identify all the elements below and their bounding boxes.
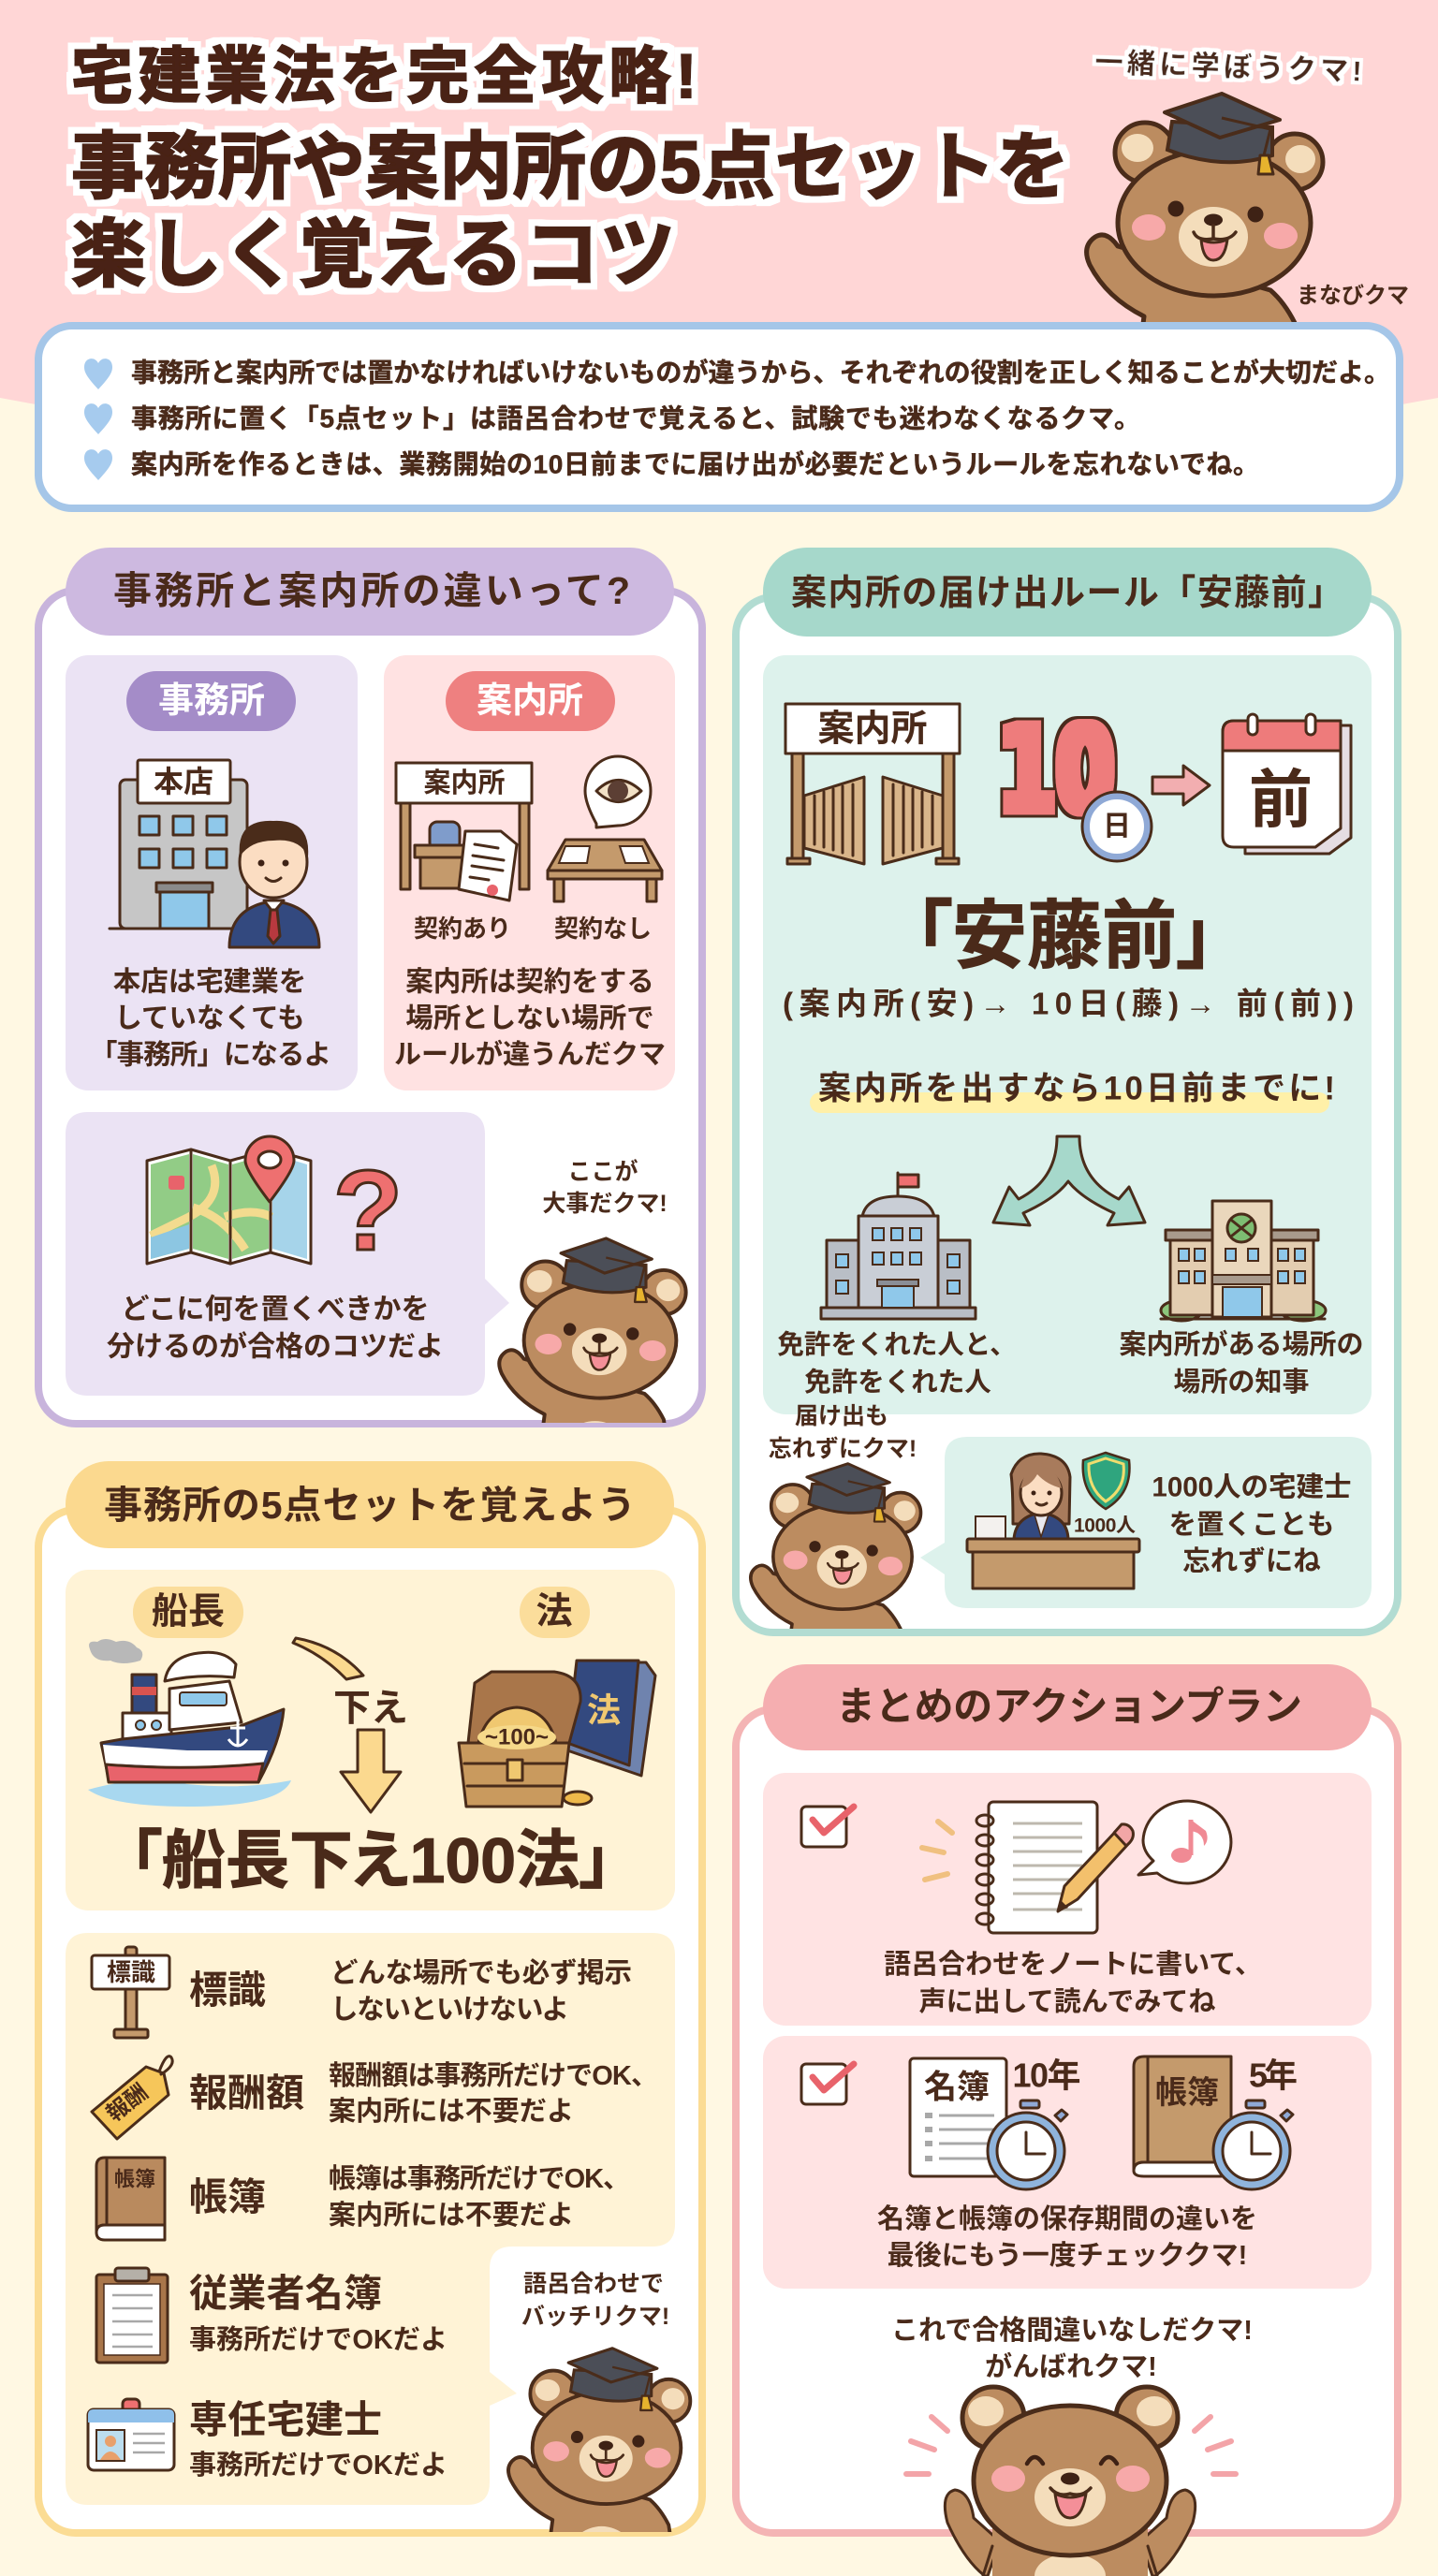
icon: building <box>110 760 247 929</box>
item: 報酬額: 報酬額は事務所だけでOK、 <box>329 2060 658 2091</box>
card: note action: 語呂合わせをノートに書いて、 <box>884 1949 1262 1980</box>
icon: eye bubble <box>585 756 651 827</box>
callout: 合格のコツ <box>66 1112 509 1396</box>
card: 事務所: 事務所 <box>158 681 265 721</box>
item: 標識: しないといけないよ <box>330 1994 569 2026</box>
船長 pill <box>133 1587 243 1638</box>
callout: 合格のコツ: 分けるのが合格のコツだよ <box>107 1331 444 1363</box>
icon: treasure chest <box>459 1672 592 1807</box>
text <box>90 966 331 1071</box>
mascot bear <box>497 1237 688 1423</box>
icon: 案内所 with contract: 案内所 <box>423 768 506 798</box>
card: review action: 名簿と帳簿の保存期間の違いを <box>877 2203 1257 2234</box>
label: 10年: 10年 <box>1013 2056 1080 2095</box>
heading pill <box>763 548 1372 637</box>
card: mnemonic: 法 <box>536 1591 573 1632</box>
title: 宅建業法を完全攻略! <box>71 41 697 110</box>
item: 帳簿: 案内所には不要だよ <box>329 2200 574 2231</box>
icon: receptionist with shield: 1000人 <box>1074 1515 1136 1537</box>
icon: checkbox <box>801 2064 854 2104</box>
panel: まとめのアクションプラン <box>736 1664 1398 2576</box>
arrow: split <box>993 1136 1145 1225</box>
callout: 1000人の宅建士 <box>920 1437 1372 1608</box>
icon: question mark: ? <box>333 1147 403 1274</box>
bear comment <box>542 1158 668 1217</box>
heading: 事務所と案内所の違いって? <box>113 569 630 612</box>
mnemonic: 「安藤前」 <box>915 895 1214 977</box>
item: 標識: どんな場所でも必ず掲示 <box>330 1958 632 1988</box>
icon: ship <box>88 1639 291 1807</box>
mascot bear cheering <box>945 2387 1196 2576</box>
panel: 事務所の5点セット <box>38 1461 702 2576</box>
heading pill <box>763 1664 1372 1750</box>
text: 「事務所」になるよ <box>90 1039 331 1071</box>
text: 本店は宅建業を <box>113 966 306 998</box>
card: note action <box>763 1773 1372 2026</box>
法 pill <box>520 1587 590 1638</box>
title: 事務所や案内所の5点セットを <box>71 125 1069 208</box>
icon: map <box>147 1136 311 1264</box>
card: 事務所 <box>66 655 358 1090</box>
callout: 合格のコツ: どこに何を置くべきかを <box>121 1294 430 1325</box>
heading pill <box>66 1461 674 1548</box>
icon: book 法 <box>567 1661 655 1776</box>
arrow: down <box>341 1730 401 1812</box>
panel: summary <box>38 326 1400 508</box>
bear comment: 大事だクマ! <box>542 1191 668 1217</box>
text: していなくても <box>114 1003 305 1033</box>
callout: 1000人の宅建士: 1000人の宅建士 <box>1152 1471 1352 1503</box>
card: note action: 声に出して読んでみてね <box>919 1986 1215 2017</box>
sparks around bear <box>906 2417 1236 2474</box>
icon: gate <box>785 704 960 864</box>
card: 案内所 <box>384 655 675 1090</box>
closing message: がんばれクマ! <box>985 2350 1157 2382</box>
icon: stopwatch <box>988 2100 1067 2189</box>
heading: 案内所の届け出ルール「安藤前」 <box>791 574 1343 613</box>
item: 専任宅建士: 事務所だけでOKだよ <box>189 2450 448 2481</box>
icon: 帳簿 book: 帳簿 <box>1155 2075 1219 2111</box>
item: 標識: 標識 <box>107 1958 155 1986</box>
closing message <box>891 2315 1253 2382</box>
pink header background <box>0 0 1438 466</box>
bear comment: バッチリクマ! <box>521 2304 669 2330</box>
icon: calendar: 前 <box>1249 765 1313 836</box>
mascot name: まなびクマ <box>1297 283 1409 309</box>
item: 標識: 標識 <box>189 1969 266 2012</box>
mascot bear <box>749 1462 923 1629</box>
arrow <box>1152 766 1210 805</box>
icon: prefecture office <box>1161 1201 1326 1321</box>
card: 案内所: 契約なし <box>554 915 652 943</box>
card: 案内所: 契約あり <box>414 915 511 943</box>
text: 知事: 場所の知事 <box>1173 1367 1310 1398</box>
card: review action: 最後にもう一度チェッククマ! <box>888 2240 1247 2271</box>
text: 免許: 免許をくれた人 <box>804 1368 991 1398</box>
card: review action <box>763 2036 1372 2289</box>
bear comment: 忘れずにクマ! <box>769 1436 917 1462</box>
bear comment <box>769 1403 917 1462</box>
text: 免許: 免許をくれた人と、 <box>777 1330 1017 1360</box>
bear speech: 一緒に学ぼうクマ: 一緒に学ぼうクマ! <box>1094 48 1362 87</box>
item: 帳簿: 帳簿 <box>114 2168 155 2190</box>
title <box>71 41 1069 296</box>
item: 帳簿: 帳簿は事務所だけでOK、 <box>329 2163 630 2194</box>
item: 報酬額: 報酬額 <box>189 2071 304 2115</box>
icon: 10日: 10 <box>998 702 1114 839</box>
icon: receptionist with shield <box>967 1453 1139 1588</box>
summary text: 事務所と案内所では置かなければいけないものが違うから、それぞれの役割を正しく知ることが大切だよ。 <box>131 358 1390 388</box>
arrow: curve <box>293 1638 363 1679</box>
icon: sparks <box>922 1822 952 1880</box>
highlight: 案内所を出すなら10日前までに! <box>818 1071 1335 1106</box>
item: 帳簿 <box>96 2158 630 2240</box>
heading: まとめのアクションプラン <box>836 1685 1302 1728</box>
icon: notebook and pencil <box>976 1802 1133 1933</box>
mnemonic expansion: (案内所(安)→ 10日(藤)→ 前(前)) <box>783 987 1354 1020</box>
icon: 名簿 paper: 名簿 <box>924 2069 990 2106</box>
mnemonic: 「船長下え100法」 <box>130 1825 611 1896</box>
icon: music bubble <box>1138 1801 1231 1883</box>
mascot: まなびクマ <box>1084 92 1326 322</box>
card: 案内所: 案内所 <box>477 681 583 721</box>
heading: 事務所の5点セットを覚えよう <box>104 1484 636 1527</box>
card: 案内所: 案内所は契約をする <box>405 966 654 998</box>
icon: calendar <box>1223 714 1351 854</box>
card: 案内所: 場所としない場所で <box>405 1003 654 1033</box>
title: 楽しく覚えるコツ <box>71 213 675 296</box>
card: 案内所: ルールが違うんだクマ <box>394 1038 666 1070</box>
closing message: これで合格間違いなしだクマ! <box>891 2315 1253 2346</box>
summary text <box>131 358 1390 479</box>
item: 従業者名簿 <box>96 2268 448 2363</box>
summary text: 案内所を作るときは、業務開始の10日前までに届け出が必要だというルールを忘れないでね。 <box>131 449 1259 479</box>
card: rule <box>763 655 1372 1414</box>
callout: 1000人の宅建士: を置くことも <box>1168 1509 1335 1541</box>
bear comment: ここが <box>567 1158 638 1185</box>
card: five items <box>66 1933 675 2505</box>
text: 知事 <box>1119 1328 1364 1398</box>
heading pill <box>66 548 674 636</box>
bear comment: 届け出も <box>795 1403 888 1429</box>
icon: book 法: 法 <box>587 1690 621 1730</box>
icon: treasure chest: ~100~ <box>485 1724 549 1750</box>
card: mnemonic <box>66 1570 675 1910</box>
下え: 下え <box>333 1688 408 1729</box>
item: 専任宅建士 <box>88 2398 448 2481</box>
icon: checkbox <box>801 1807 854 1847</box>
item: 標識 <box>92 1947 632 2038</box>
bear comment <box>521 2271 669 2330</box>
summary text: 事務所に置く「5点セット」は語呂合わせで覚えると、試験でも迷わなくなるクマ。 <box>131 404 1140 432</box>
icon: stopwatch <box>1213 2100 1293 2189</box>
item: 専任宅建士: 専任宅建士 <box>189 2398 382 2441</box>
item: 帳簿: 帳簿 <box>189 2175 266 2218</box>
icon: 名簿 paper <box>910 2058 1006 2176</box>
icon: gate: 案内所 <box>817 710 928 749</box>
panel: 案内所の届け出ルール <box>736 548 1398 1691</box>
icon: 帳簿 book <box>1134 2056 1231 2176</box>
icon: businessman <box>229 821 319 947</box>
item: 報酬額: 報酬 <box>102 2080 153 2127</box>
mascot bear <box>506 2347 693 2532</box>
callout: 1000人の宅建士: 忘れずにね <box>1182 1546 1321 1576</box>
card: mnemonic: 船長 <box>152 1591 225 1632</box>
item: 従業者名簿: 事務所だけでOKだよ <box>189 2324 448 2355</box>
text: 免許 <box>777 1330 1017 1398</box>
icon: 案内所 with contract <box>396 763 532 900</box>
label: 5年: 5年 <box>1249 2056 1298 2095</box>
item: 報酬額 <box>92 2056 658 2139</box>
text: 知事: 案内所がある場所の <box>1119 1328 1364 1360</box>
icon: government building <box>821 1173 976 1319</box>
icon: building: 本店 <box>154 765 213 798</box>
item: 従業者名簿: 従業者名簿 <box>189 2272 382 2315</box>
bear comment: 語呂合わせで <box>523 2271 664 2297</box>
icon: table <box>548 840 662 901</box>
icon: heart bullets <box>84 359 112 480</box>
icon: 10日: 日 <box>1103 811 1131 842</box>
item: 報酬額: 案内所には不要だよ <box>329 2096 574 2127</box>
panel: 事務所と案内所の違い <box>38 548 702 1488</box>
